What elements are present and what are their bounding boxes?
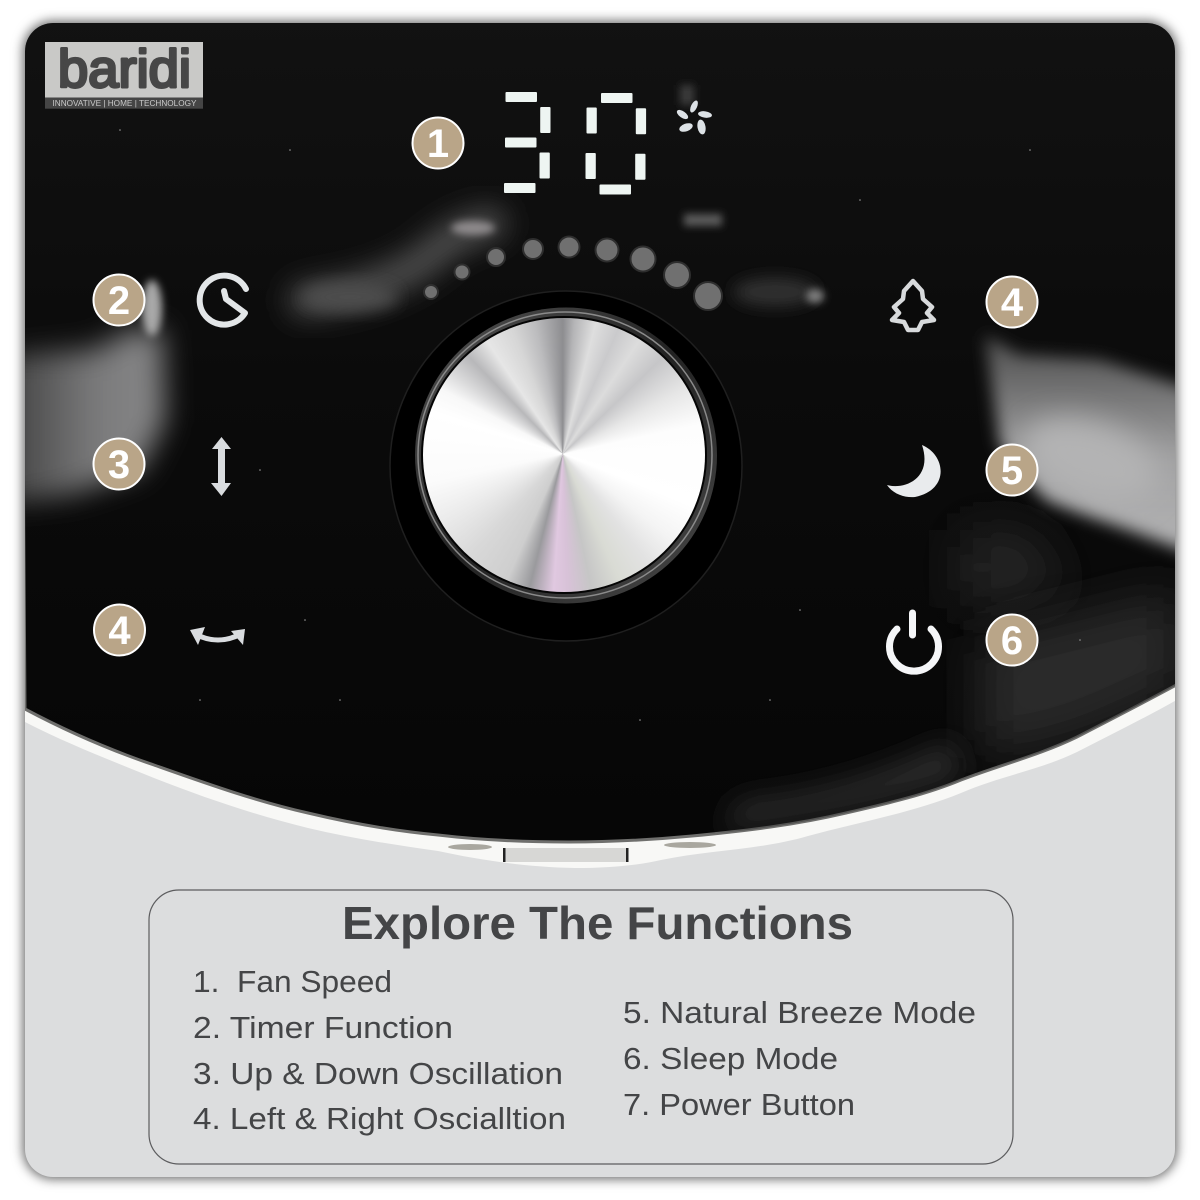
white chrome rim [25, 688, 1175, 868]
panel: explore the functions [149, 890, 1013, 1164]
icon: natural breeze tree [892, 281, 934, 330]
icon: fan [675, 99, 712, 135]
badge 5 [986, 444, 1038, 496]
badge 3: 3 [108, 443, 130, 487]
list column two: 5. Natural Breeze Mode [623, 995, 976, 1030]
glossy black panel [20, 0, 1180, 842]
knob housing [390, 291, 742, 641]
badge 4 right: 4 [1001, 281, 1024, 325]
badge 4 left [94, 604, 145, 656]
list column one: 1. Fan Speed [193, 964, 392, 999]
badge 1: 1 [427, 122, 449, 166]
logo: baridi: INNOVATIVE | HOME | TECHNOLOGY [52, 99, 197, 108]
knob: brushed metal dial [423, 318, 705, 592]
icon: power [889, 613, 938, 671]
speed level dots [424, 236, 722, 310]
badge 2 [94, 274, 144, 326]
list column two: 6. Sleep Mode [623, 1041, 838, 1076]
product photo: fan control panel [0, 0, 1200, 868]
badge 4 left: 4 [108, 609, 131, 653]
badge 2: 2 [108, 279, 130, 323]
logo: baridi: baridi [58, 40, 191, 99]
badge 3 [94, 438, 144, 490]
badge 6 [986, 614, 1038, 666]
list column one: 4. Left & Right Oscialltion [193, 1101, 566, 1136]
list column two [623, 995, 976, 1122]
heading: Explore The Functions [342, 897, 853, 949]
badge 1 [412, 118, 464, 168]
badge 6: 6 [1001, 619, 1023, 663]
icon: up and down arrow [211, 437, 231, 496]
icon: left and right arrow [190, 627, 245, 645]
list column one: 3. Up & Down Oscillation [193, 1056, 563, 1091]
badge 4 right [986, 276, 1038, 328]
badge 5: 5 [1001, 449, 1023, 493]
list column one [193, 964, 566, 1136]
panel reflections [0, 85, 1200, 830]
icon: timer [200, 276, 246, 325]
list column two: 7. Power Button [623, 1087, 855, 1122]
list column one: 2. Timer Function [193, 1010, 453, 1045]
icon: moon [887, 445, 941, 497]
display: 7-segment reading 30 [504, 92, 646, 194]
silver rim button [448, 842, 716, 862]
